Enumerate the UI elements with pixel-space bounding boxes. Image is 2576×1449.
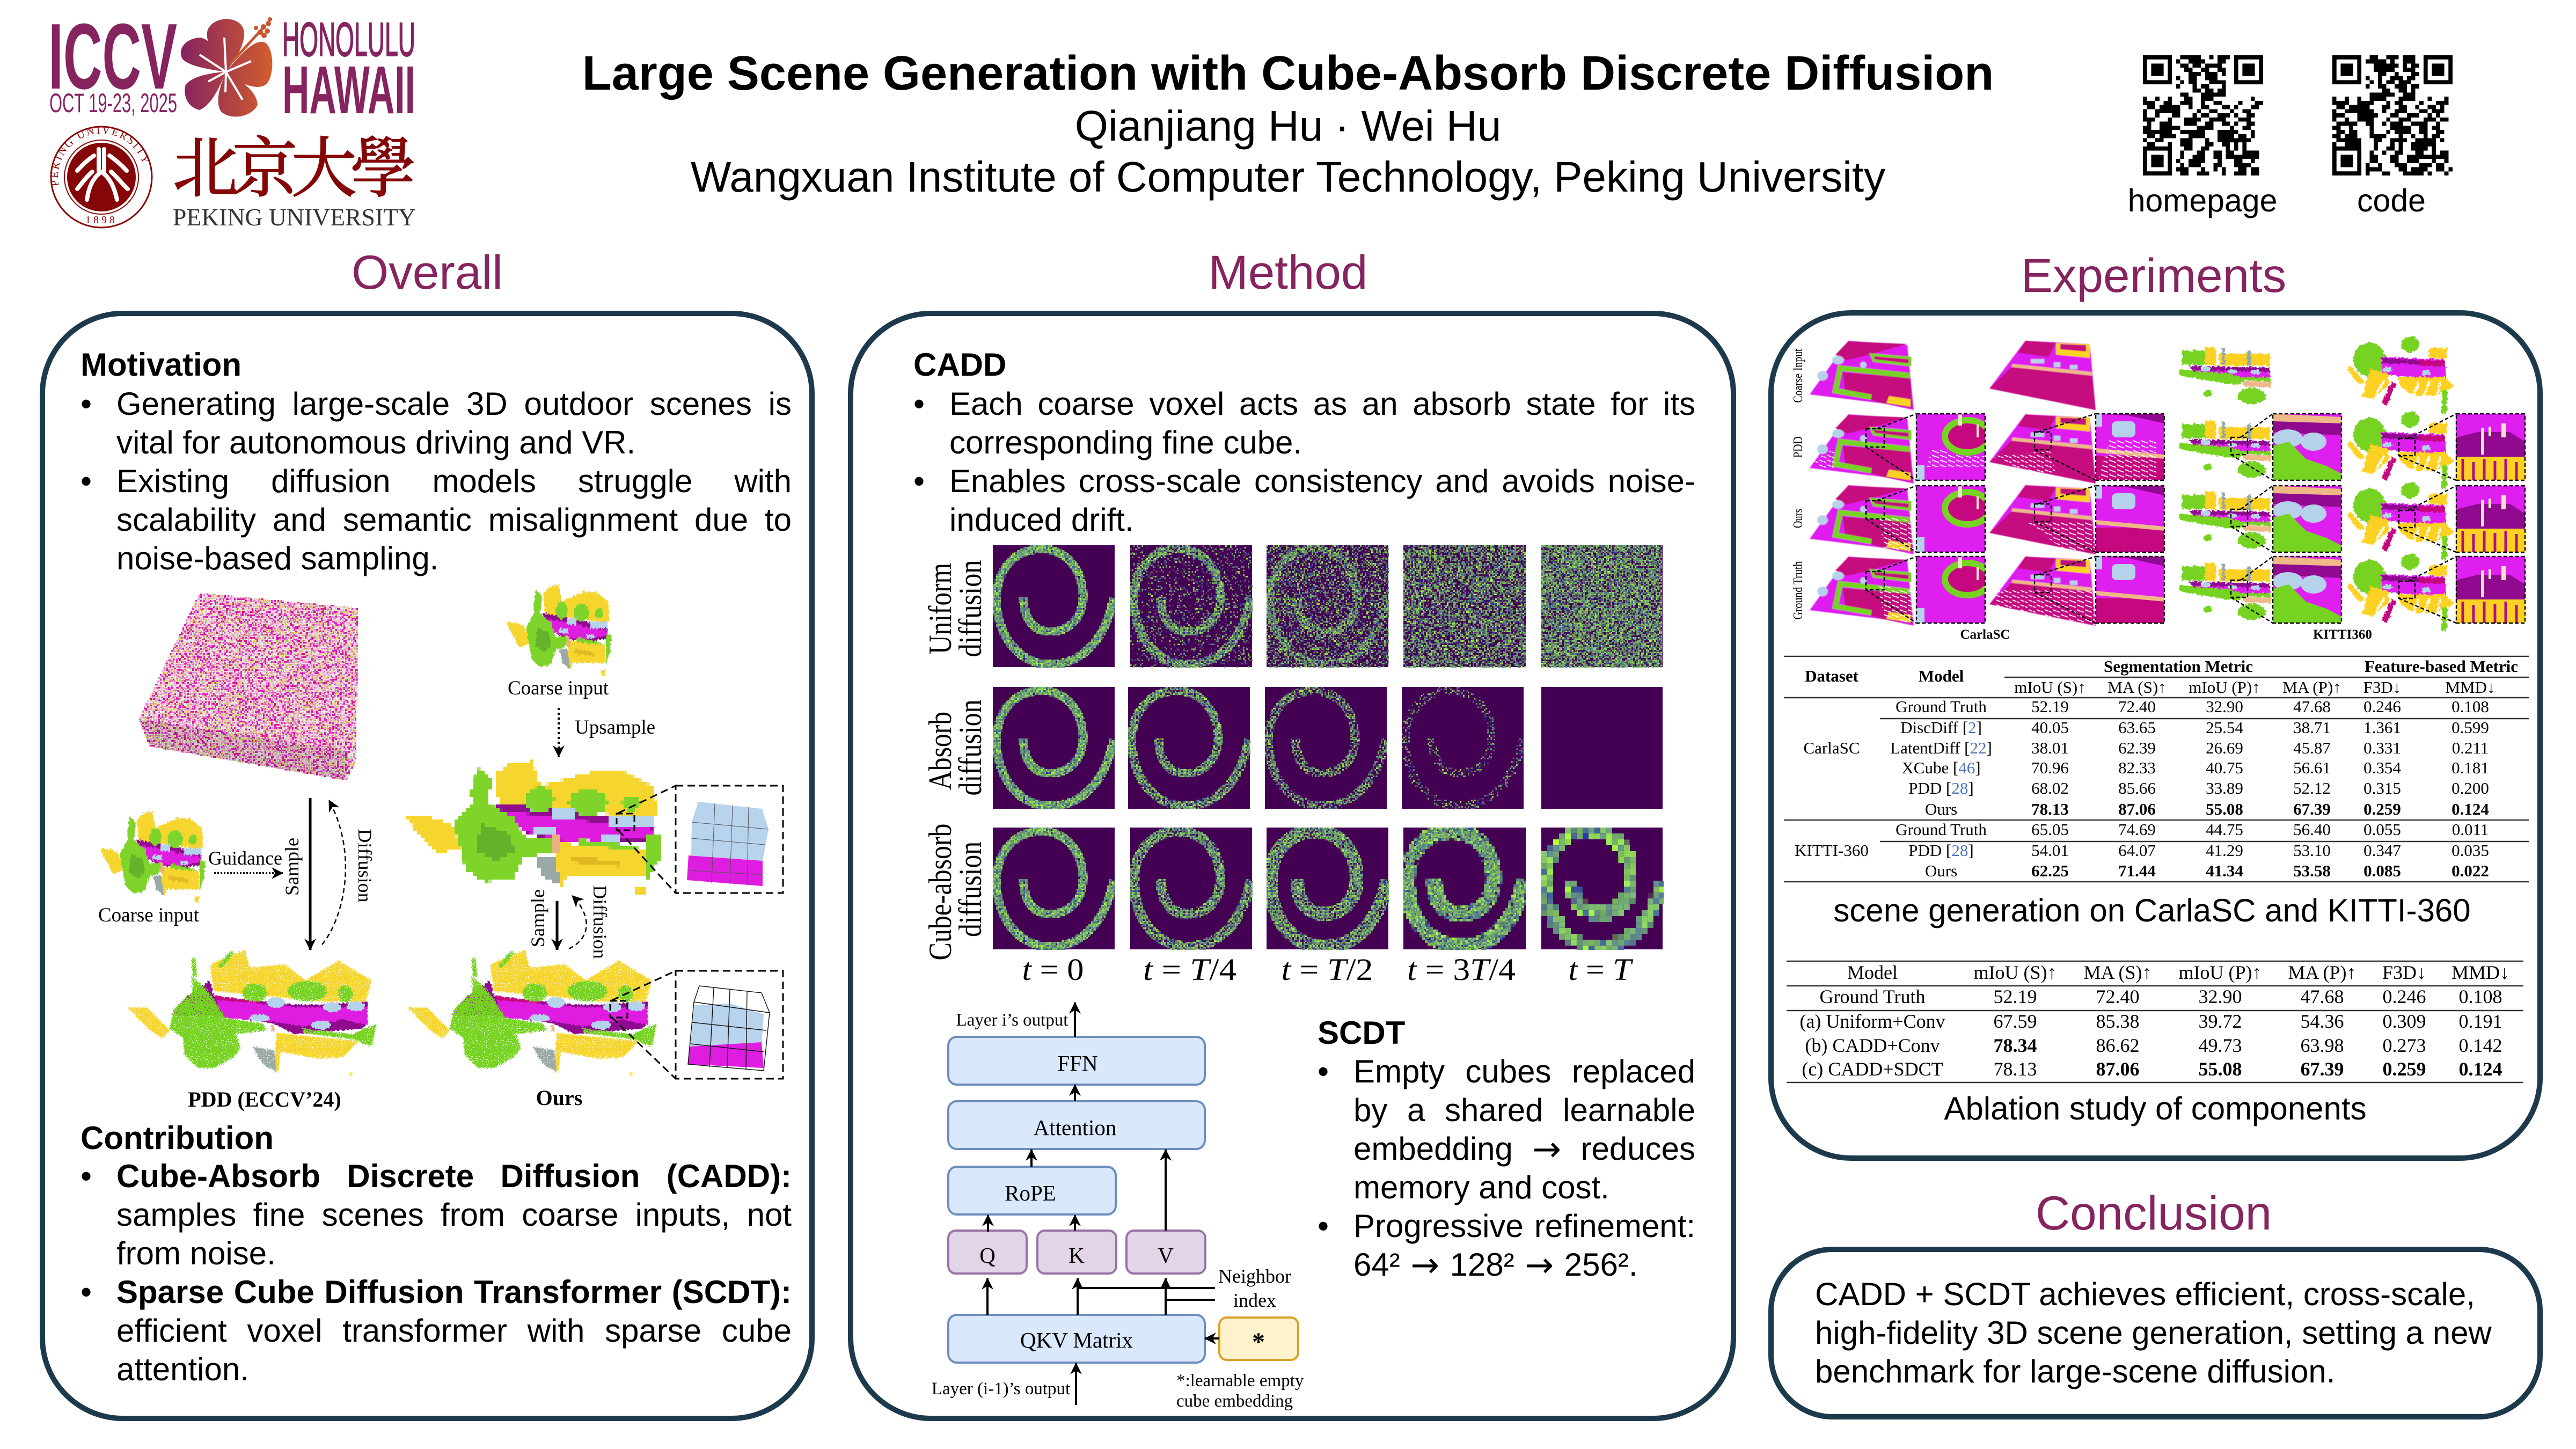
table rows: 39.72 [2198,1011,2242,1032]
row labels: Coarse Input [1791,348,1805,402]
metric values: 53.58 [2293,861,2331,880]
time step labels [1022,952,1633,987]
caption: scene generation: scene generation on CarlaSC and KITTI-360 [1833,892,2471,928]
chart: diffusion spiral grid [850,312,1735,1419]
table rows: 0.191 [2459,1011,2502,1032]
coarse input scene, top [507,584,612,676]
metric values: 63.65 [2118,718,2156,737]
table rows: 78.13 [1993,1058,2037,1080]
text: motivation [80,347,792,576]
QR matrix [2143,55,2267,175]
table rules [1784,656,2529,882]
arrows [987,1002,1219,1405]
university name in Chinese: 北京大學 [173,116,416,210]
table: scene generation metrics [1784,656,2529,882]
dataset labels: CarlaSC [1803,738,1860,757]
text: contribution: attention. [116,1351,249,1387]
block: learnable embedding: * [1252,1328,1265,1356]
university name in English: PEKING UNIVERSITY [173,203,416,231]
figure: PDD versus ours pipeline [98,584,784,1111]
table header: mIoU (P)↑ [2179,962,2262,983]
text: contribution: Cube-Absorb Discrete Diffusion (CADD): [116,1158,792,1194]
table header: Segmentation Metric [2104,657,2253,676]
label: diffusion, short: Diffusion [589,885,611,959]
metric values: 0.055 [2363,820,2401,839]
label: neighbor index [1218,1265,1291,1311]
row: cube-absorb diffusion [923,823,1663,961]
diagram: sparse cube transformer [932,1002,1304,1411]
table rows: 78.34 [1993,1035,2037,1056]
cell [993,687,1115,809]
text: SCDT [1318,1014,1699,1285]
block: attention [948,1101,1205,1149]
row: absorb diffusion [923,687,1663,809]
row label: uniform diffusion: Uniform [923,563,958,654]
metric values: 64.07 [2118,841,2156,860]
metric values: 26.69 [2206,738,2243,757]
heading: Method: Method [1209,245,1367,299]
coarse voxel scene [407,761,662,895]
zoom callout: coarse cube [617,786,783,893]
metric values: 0.035 [2451,841,2489,860]
text: CADD: • [913,386,925,422]
label: diffusion, long: Diffusion [354,829,376,903]
label: ours: Ours [536,1086,582,1110]
label: PDD: PDD (ECCV’24) [188,1087,341,1111]
metric values [2031,697,2489,880]
text: contribution: Contribution [80,1120,274,1156]
row label: cube-absorb diffusion: diffusion [953,841,988,937]
text: contribution [80,1120,792,1387]
row labels [1791,348,1805,619]
label: neighbor index: Neighbor [1218,1265,1291,1287]
cell [993,828,1115,949]
table rows: 55.08 [2198,1058,2242,1080]
text: CADD: Enables cross-scale consistency and avoids noise- [949,463,1695,499]
table rows: 86.62 [2096,1035,2139,1056]
cell [1541,828,1663,949]
metric values: 0.347 [2363,841,2401,860]
panel: Overall [40,311,815,1421]
text: motivation: vital for autonomous driving and VR. [116,425,635,460]
cell [1267,545,1389,668]
caption: ablation study: Ablation study of components [1944,1091,2367,1126]
row labels: PDD [1791,436,1805,458]
table header: MA (S)↑ [2107,678,2167,697]
row label: cube-absorb diffusion [923,823,988,961]
icon: university seal [50,126,152,229]
table header [1805,657,2518,697]
row labels: Ground Truth [1791,561,1805,619]
metric values: 0.259 [2363,800,2401,818]
metric values: 38.01 [2031,738,2069,757]
note: learnable embedding: *:learnable empty [1176,1371,1304,1391]
block: FFN [948,1037,1205,1085]
text: motivation: • [80,463,92,499]
block: Q [948,1231,1027,1274]
caption: CarlaSC: CarlaSC [1960,627,2010,642]
column: KITTI-360 scene one [2180,347,2341,623]
model column: Ours [1925,800,1957,818]
Hawaii wordmark: HAWAII [282,52,415,128]
metric values: 0.211 [2452,738,2489,757]
heading: Overall: Overall [352,245,503,299]
metric values: 0.331 [2363,738,2401,757]
table rows: 87.06 [2096,1058,2139,1080]
icon: university seal: 1898 [85,214,118,226]
table rows: 0.108 [2459,986,2502,1007]
cell [1267,828,1388,949]
metric values: 33.89 [2206,779,2243,797]
metric values: 0.599 [2451,718,2489,737]
block: K: K [1069,1243,1085,1268]
text: contribution: from noise. [116,1235,276,1271]
arrow: upsample [558,708,560,757]
text: SCDT: Empty cubes replaced [1353,1053,1695,1089]
table header: MMD↓ [2445,678,2496,697]
metric values: 25.54 [2206,718,2243,737]
cell [1128,687,1250,809]
row label: cube-absorb diffusion: Cube-absorb [923,823,958,961]
model column: XCube [46] [1901,758,1981,777]
table header: Model [1919,667,1964,685]
panel: Conclusion [1770,1248,2541,1418]
table rows: 72.40 [2096,986,2139,1007]
block: FFN: FFN [1057,1051,1098,1075]
text: conclusion [1815,1275,2513,1391]
table rows: 0.259 [2383,1058,2426,1080]
text: SCDT: • [1318,1053,1329,1089]
row label: uniform diffusion [923,560,988,657]
table header: MA (S)↑ [2083,962,2152,983]
dataset labels [1795,738,1869,860]
noise voxel cube [139,593,358,780]
QR code: homepage [2128,55,2277,218]
model column: Ground Truth [1896,697,1987,716]
label: neighbor index: index [1233,1290,1276,1311]
cell [993,545,1115,667]
metric values: 0.011 [2452,820,2489,839]
text: conclusion: CADD + SCDT achieves efficient, cross-scale, [1815,1276,2475,1312]
label: sample, long: Sample [281,838,303,896]
text: contribution: • [80,1274,92,1310]
row labels: Ours [1791,509,1805,528]
block: RoPE: RoPE [1005,1181,1056,1205]
panel: Experiments [1770,312,2541,1159]
metric values: 40.05 [2031,718,2069,737]
metric values: 0.315 [2363,779,2401,797]
column: CarlaSC scene two [1989,341,2164,626]
model column [1890,697,1992,880]
model column: Ours [1925,861,1957,880]
text: SCDT: memory and cost. [1353,1169,1609,1205]
table rows: 67.39 [2300,1058,2344,1080]
cell [1541,687,1663,809]
PDD result scene [127,950,377,1075]
metric values: 1.361 [2363,718,2401,737]
text: SCDT: embedding → reduces [1353,1130,1695,1169]
row label: absorb diffusion [923,700,988,795]
metric values: 56.40 [2293,820,2331,839]
label: upsample: Upsample [575,716,655,738]
table header: MMD↓ [2451,962,2509,983]
block: attention: Attention [1034,1115,1116,1140]
metric values: 65.05 [2031,820,2069,839]
text: motivation: Generating large-scale 3D outdoor scenes is [116,386,792,422]
label: layer i-1 output: Layer (i-1)’s output [932,1379,1070,1399]
text: contribution: • [80,1158,92,1194]
metric values: 70.96 [2031,758,2069,777]
block: V [1126,1231,1205,1274]
metric values: 67.39 [2293,800,2331,818]
arrow: sample, long [309,798,311,950]
icon: university seal: PEKING UNIVERSITY [52,128,148,186]
metric values: 47.68 [2293,697,2331,716]
label: layer i output: Layer i’s output [956,1011,1068,1030]
table rows: 0.309 [2383,1011,2426,1032]
table rows: 63.98 [2300,1035,2344,1056]
text: motivation: Motivation [80,347,241,383]
cell [1403,828,1526,949]
cell [1265,687,1387,809]
header [48,4,2453,302]
metric values: 82.33 [2118,758,2156,777]
cell [1130,828,1252,949]
arrow: guidance [214,872,283,874]
text: CADD: corresponding fine cube. [949,425,1302,460]
table rows: 67.59 [1993,1011,2037,1032]
dataset labels: KITTI-360 [1795,841,1869,860]
text: SCDT: Progressive refinement: [1353,1208,1695,1244]
table rows: 85.38 [2096,1011,2139,1032]
model column: PDD [28] [1908,779,1974,797]
row label: absorb diffusion: Absorb [923,712,958,790]
metric values: 56.61 [2293,758,2331,777]
block: Q: Q [979,1243,996,1268]
arrow: diffusion, long [322,800,346,945]
metric values: 52.12 [2293,779,2331,797]
title: Large Scene Generation with Cube-Absorb Discrete Diffusion [582,47,1994,100]
panel: Method [848,311,1736,1421]
metric values: 62.25 [2031,861,2069,880]
row label: uniform diffusion: diffusion [953,560,988,657]
cell [1130,545,1253,668]
time step labels: t = 0 [1022,952,1084,987]
text: motivation: noise-based sampling. [116,540,438,576]
table header: F3D↓ [2363,678,2401,697]
table rules [1787,961,2523,1082]
text: SCDT: 64² → 128² → 256². [1353,1246,1638,1285]
table rows: 0.124 [2459,1058,2502,1080]
ICCV wordmark: ICCV [48,4,177,108]
text: contribution: Sparse Cube Diffusion Transformer (SCDT): [116,1274,792,1310]
note: learnable embedding: cube embedding [1176,1392,1293,1411]
text: motivation: • [80,386,92,422]
table rows: 49.73 [2198,1035,2242,1056]
metric values: 87.06 [2118,800,2156,818]
text: contribution: samples fine scenes from coarse inputs, not [116,1197,792,1233]
metric values: 68.02 [2031,779,2069,797]
metric values: 38.71 [2293,718,2331,737]
affiliation: Wangxuan Institute of Computer Technology, Peking University [691,153,1885,201]
text: CADD: induced drift. [949,502,1134,538]
metric values: 74.69 [2118,820,2156,839]
metric values: 85.66 [2118,779,2156,797]
metric values: 40.75 [2206,758,2243,777]
QR code: code [2332,55,2453,218]
label: coarse input, top: Coarse input [508,677,609,699]
metric values: 52.19 [2031,697,2069,716]
metric values: 55.08 [2206,800,2243,818]
metric values: 54.01 [2031,841,2069,860]
arrow: diffusion, short [569,896,587,949]
model column: Ground Truth [1896,820,1987,839]
metric values: 0.246 [2363,697,2401,716]
metric values: 41.29 [2206,841,2243,860]
QR label: code [2357,183,2426,218]
text: contribution: efficient voxel transformer with sparse cube [116,1313,792,1349]
text: CADD [913,347,1695,538]
model column: LatentDiff [22] [1890,738,1992,757]
table rows [1799,986,2502,1080]
table rows: (c) CADD+SDCT [1802,1058,1943,1080]
cell [1541,545,1663,667]
metric values: 0.124 [2451,800,2489,818]
text: SCDT: by a shared learnable [1353,1092,1695,1128]
ours result scene [407,950,657,1075]
metric values: 41.34 [2206,861,2243,880]
metric values: 32.90 [2206,697,2243,716]
table header: F3D↓ [2382,962,2426,983]
text: CADD: • [913,463,925,499]
note: learnable embedding [1176,1371,1304,1411]
metric values: 78.13 [2031,800,2069,818]
row: uniform diffusion [923,545,1663,668]
text: motivation: scalability and semantic misalignment due to [116,502,792,538]
metric values: 62.39 [2118,738,2156,757]
text: SCDT: • [1318,1208,1329,1244]
time step labels: t = 3T/4 [1407,952,1516,987]
zoom callout: fine cube [610,971,783,1079]
row label: absorb diffusion: diffusion [953,700,988,795]
metric values: 44.75 [2206,820,2243,839]
metric values: 53.10 [2293,841,2331,860]
block: learnable embedding [1219,1318,1298,1360]
metric values: 0.181 [2451,758,2489,777]
metric values: 0.108 [2451,697,2489,716]
heading: Conclusion: Conclusion [2036,1186,2272,1240]
Honolulu wordmark: HONOLULU [282,12,415,66]
table header: Model [1847,962,1898,983]
metric values: 71.44 [2118,861,2156,880]
QR label: homepage [2128,183,2277,218]
metric values: 0.022 [2451,861,2489,880]
cell [1402,687,1524,809]
table rows: 52.19 [1993,986,2037,1007]
model column: PDD [28] [1908,841,1974,860]
time step labels: t = T [1568,952,1633,987]
block: RoPE [948,1167,1116,1214]
text: motivation: Existing diffusion models struggle with [116,463,792,499]
table rows: 32.90 [2198,986,2242,1007]
table rows: 0.142 [2459,1035,2502,1056]
metric values: 0.085 [2363,861,2401,880]
metric values: 0.354 [2363,758,2401,777]
label: sample, short: Sample [527,889,548,947]
text: CADD: Each coarse voxel acts as an absorb state for its [949,386,1695,422]
table rows: 0.273 [2383,1035,2426,1056]
text: SCDT: SCDT [1318,1015,1405,1051]
text: CADD: CADD [913,347,1006,383]
QR matrix [2332,55,2453,175]
text: conclusion: benchmark for large-scene diffusion. [1815,1353,2335,1389]
label: guidance: Guidance [208,847,282,869]
text: conclusion: high-fidelity 3D scene generation, setting a new [1815,1315,2492,1351]
logo: Peking University [50,116,416,231]
label: coarse input, left: Coarse input [98,904,200,926]
table header: mIoU (P)↑ [2189,678,2260,697]
heading: Experiments: Experiments [2021,248,2286,302]
metric values: 72.40 [2118,697,2156,716]
figure: qualitative comparison [1791,336,2525,642]
time step labels: t = T/4 [1143,952,1236,987]
table header: MA (P)↑ [2288,962,2357,983]
coarse input scene, left [101,811,206,902]
metric values: 45.87 [2293,738,2331,757]
conference date: OCT 19-23, 2025 [49,88,177,118]
authors: Qianjiang Hu · Wei Hu [1075,102,1501,150]
table rows: 47.68 [2300,986,2344,1007]
block: V: V [1158,1243,1174,1268]
table header: mIoU (S)↑ [1974,962,2057,983]
column: CarlaSC scene one [1810,341,1990,626]
metric values: 0.200 [2451,779,2489,797]
caption: KITTI360: KITTI360 [2313,627,2372,642]
table rows: 54.36 [2300,1011,2344,1032]
column: KITTI-360 scene two [2349,336,2525,631]
table rows: Ground Truth [1819,986,1926,1007]
table rows: (a) Uniform+Conv [1799,1011,1945,1032]
block: QKV matrix [948,1315,1205,1363]
model column: DiscDiff [2] [1900,718,1982,737]
block: K [1037,1231,1116,1274]
icon: hibiscus flower [181,17,272,116]
table rows: 0.246 [2383,986,2426,1007]
table rows: (b) CADD+Conv [1805,1035,1940,1056]
logo: ICCV Honolulu Hawaii [48,4,415,128]
arrow: sample, short [556,901,558,950]
table header: mIoU (S)↑ [2014,678,2086,697]
table header: Dataset [1805,667,1859,685]
table header: Feature-based Metric [2365,657,2518,676]
table header: MA (P)↑ [2282,678,2341,697]
cell [1403,545,1526,668]
time step labels: t = T/2 [1282,952,1373,987]
table: ablation study [1787,961,2523,1082]
block: QKV matrix: QKV Matrix [1020,1328,1133,1352]
